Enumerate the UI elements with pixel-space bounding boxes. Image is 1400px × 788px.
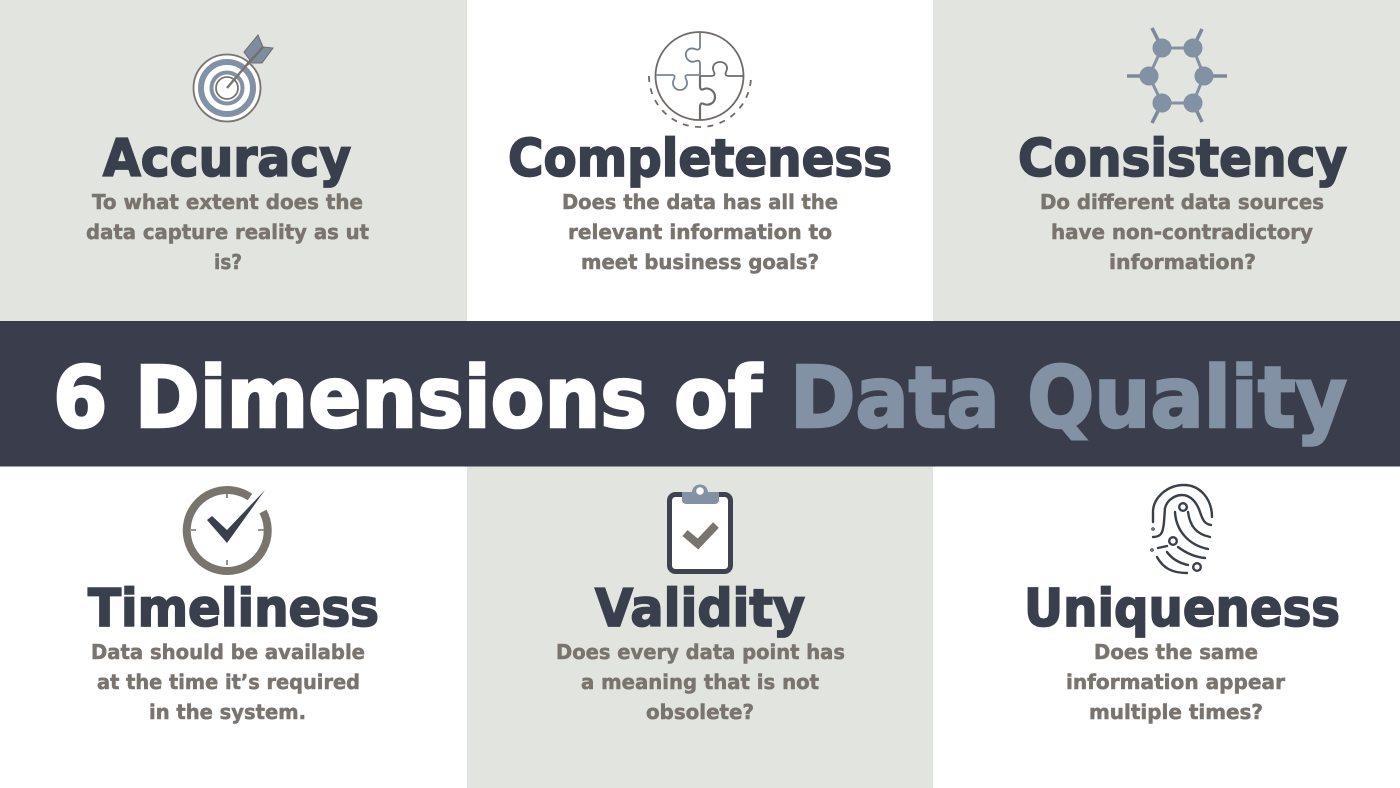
text: accuracy description: data capture reality as ut	[86, 220, 369, 244]
text: timeliness description: in the system.	[149, 700, 306, 724]
icon: clipboard with check	[670, 484, 730, 572]
text: consistency description	[1040, 190, 1324, 274]
text: timeliness description: at the time it’s required	[97, 670, 360, 694]
text: consistency description: information?	[1109, 250, 1256, 274]
icon: hexagon molecule	[1127, 28, 1227, 123]
panel: accuracy	[0, 0, 467, 321]
title banner	[0, 321, 1400, 466]
text: timeliness description: Data should be available	[91, 640, 365, 664]
heading: Completeness: Completeness	[508, 129, 892, 189]
heading: Accuracy: Accuracy	[103, 129, 351, 189]
text: completeness description: Does the data has all the	[562, 190, 838, 214]
text: accuracy description: To what extent does the	[92, 190, 363, 214]
text: uniqueness description: Does the same	[1094, 640, 1258, 664]
icon: fingerprint	[1151, 485, 1212, 573]
text: validity description: Does every data point has	[556, 640, 845, 664]
heading: Validity: Validity	[595, 579, 805, 639]
panel: timeliness	[0, 466, 467, 788]
heading: Timeliness: Timeliness	[88, 579, 379, 639]
text: validity description: obsolete?	[646, 700, 754, 724]
text: validity description: a meaning that is not	[581, 670, 819, 694]
text: completeness description	[562, 190, 838, 274]
panel: validity	[467, 466, 933, 788]
panel: consistency	[933, 0, 1400, 321]
text: accuracy description	[86, 190, 369, 274]
icon: target with arrow	[194, 35, 273, 122]
text: completeness description: meet business goals?	[581, 250, 819, 274]
icon: clock with check mark	[187, 490, 268, 571]
text: accuracy description: is?	[214, 250, 242, 274]
heading: Consistency: Consistency	[1018, 129, 1347, 189]
title: Data Quality: Data Quality	[790, 349, 1347, 448]
text: uniqueness description: multiple times?	[1089, 700, 1263, 724]
text: uniqueness description	[1066, 640, 1286, 724]
text: consistency description: have non-contradictory	[1051, 220, 1313, 244]
panel: completeness	[467, 0, 933, 321]
title: 6 Dimensions of: 6 Dimensions of	[53, 349, 763, 448]
panel: uniqueness	[933, 466, 1400, 788]
text: consistency description: Do different data sources	[1040, 190, 1324, 214]
icon: puzzle circle	[649, 32, 751, 127]
text: validity description	[556, 640, 845, 724]
text: uniqueness description: information appear	[1066, 670, 1286, 694]
heading: Uniqueness: Uniqueness	[1024, 579, 1340, 639]
text: timeliness description	[91, 640, 365, 724]
text: completeness description: relevant information to	[568, 220, 832, 244]
